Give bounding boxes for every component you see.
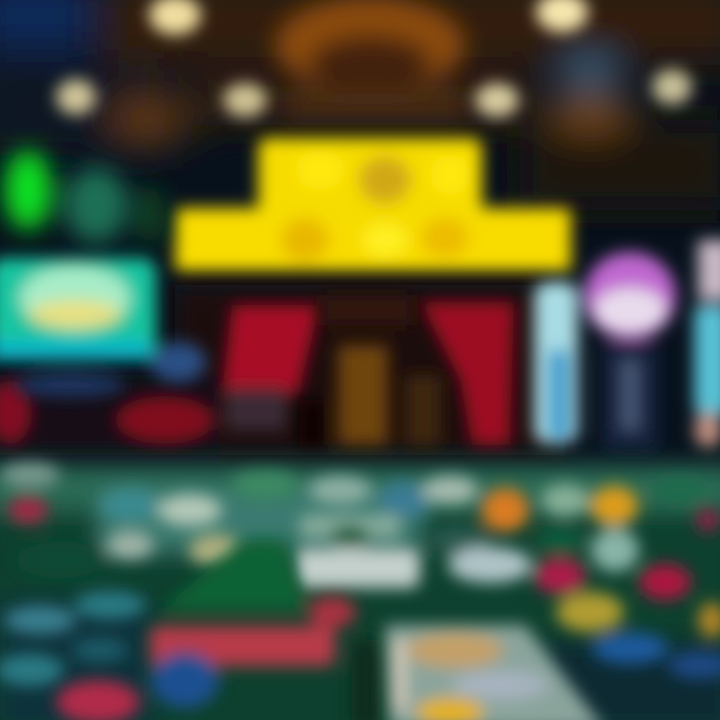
left teal screen xyxy=(0,258,206,397)
gaming tables xyxy=(0,463,720,686)
right slot machines xyxy=(534,240,720,450)
yellow stepped marquee xyxy=(175,138,571,272)
ceiling dome xyxy=(275,0,465,116)
casino floor xyxy=(0,465,720,720)
green table foreground xyxy=(56,540,380,720)
center stage door xyxy=(300,295,441,450)
ceiling xyxy=(0,0,720,210)
green glow xyxy=(4,150,164,245)
ceiling lights xyxy=(56,0,692,117)
red curtains xyxy=(0,302,514,445)
foreground card table xyxy=(385,625,605,720)
stage dark band xyxy=(0,285,565,455)
